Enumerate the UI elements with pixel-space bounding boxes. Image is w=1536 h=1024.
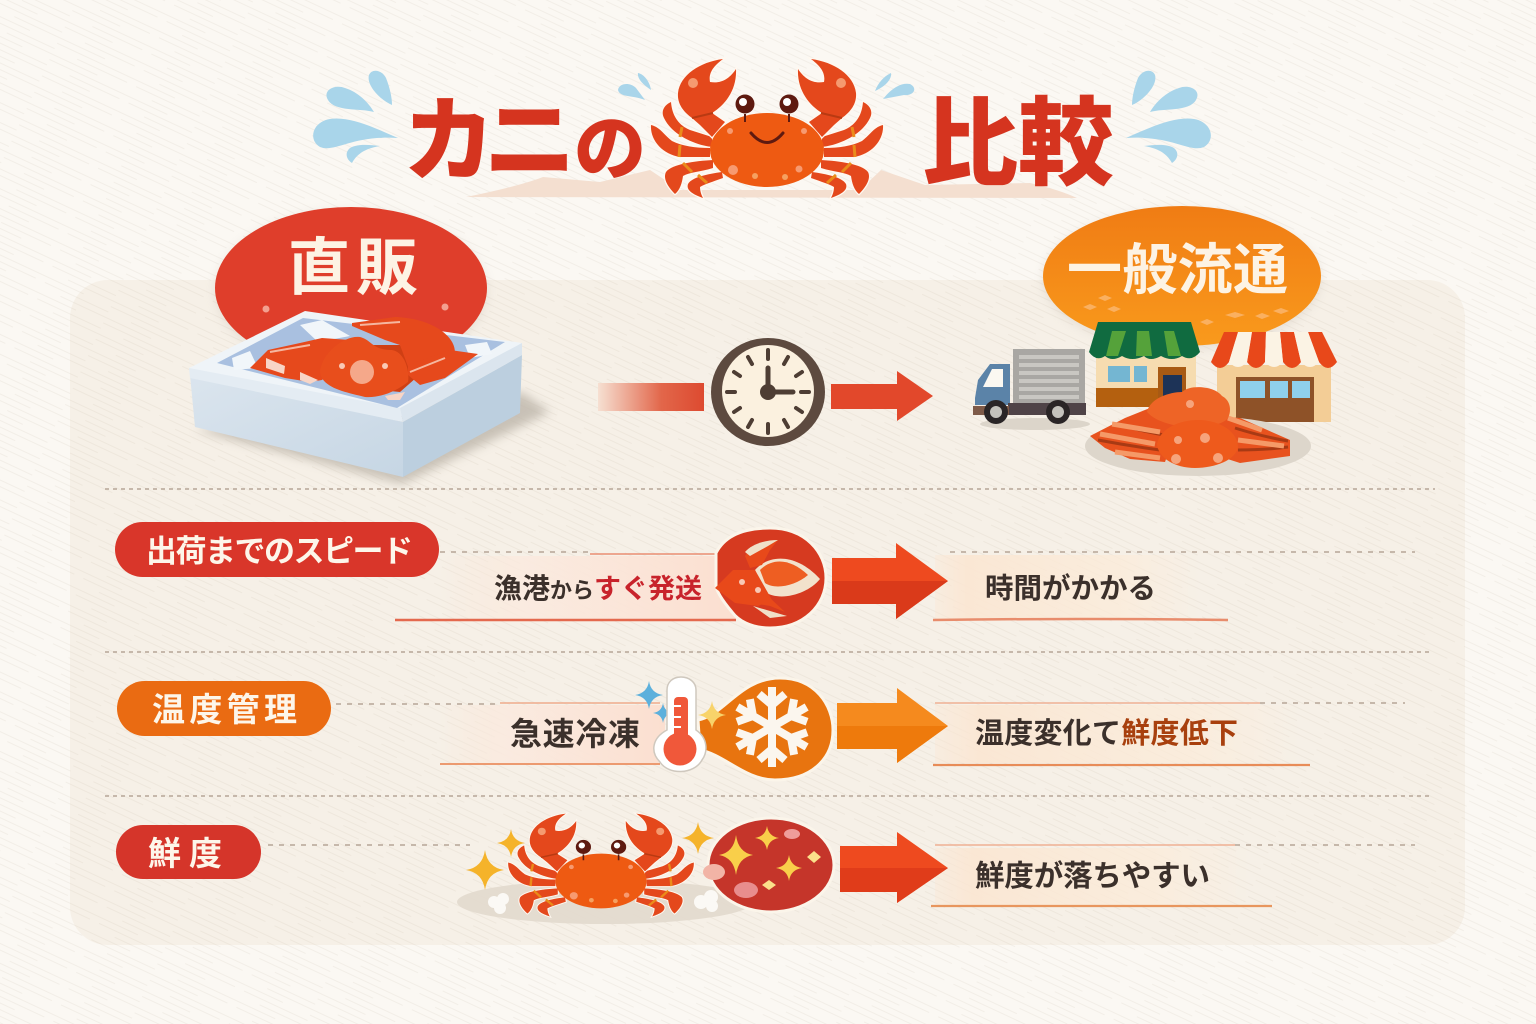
arrow: [832, 543, 948, 619]
header: title with crab: [313, 59, 1211, 198]
icon: truck: [973, 349, 1090, 430]
icon: striped shop: [1211, 332, 1337, 422]
text strip: general: [933, 555, 1228, 620]
icon: pile of crabs: [1085, 387, 1311, 476]
text strip: general: 鮮度が落ちやすい: [975, 859, 1210, 893]
water splash right: [1126, 71, 1211, 163]
icon: clock: [711, 338, 825, 446]
title text left: [403, 91, 646, 193]
arrow tail: [598, 383, 704, 411]
arrow: [840, 832, 948, 903]
shadow under crab: [457, 880, 753, 924]
icon: ice chunks: [488, 890, 718, 914]
row: freshness: [116, 814, 1415, 924]
arrow: [837, 688, 948, 763]
title text left: カ: [403, 91, 495, 193]
water splash left: [313, 71, 398, 163]
crabs inside box: [250, 317, 478, 400]
title text left: の: [574, 110, 646, 190]
title crab: [651, 59, 883, 198]
icon: sparkling red blob: [703, 818, 834, 912]
oval: general distribution: [1043, 206, 1321, 349]
label pill: freshness: 鮮度: [148, 835, 230, 872]
text strip: direct: 漁港からすぐ発送: [494, 573, 702, 604]
text strip: general: [933, 703, 1405, 765]
label pill: temperature: [117, 681, 331, 736]
row dividers: [105, 489, 1435, 796]
sand under title: [466, 170, 1077, 198]
title text left: ニ: [484, 91, 576, 193]
text strip: direct: [440, 703, 665, 764]
icon: blue sparkles: [635, 681, 673, 723]
label pill: temperature: 温度管理: [152, 691, 297, 728]
icon: red crab: [508, 814, 694, 917]
small droplets left: [618, 73, 651, 100]
label pill: shipping speed: [115, 522, 439, 577]
comparison panel: [70, 280, 1465, 945]
heading: direct sales: 直販: [288, 234, 424, 303]
label pill: shipping speed: 出荷までのスピード: [146, 534, 413, 569]
arrow head: [831, 371, 933, 421]
title text right: 比較: [922, 91, 1114, 198]
label pill: freshness: [116, 825, 261, 879]
heading: general distribution: 一般流通: [1067, 239, 1288, 301]
text strip: general: [931, 845, 1415, 906]
text strip: general: 時間がかかる: [985, 572, 1156, 605]
icon: crab pieces circle: [715, 528, 826, 628]
text strip: general: 温度変化て鮮度低下: [975, 717, 1238, 750]
arrow with clock: [598, 338, 933, 446]
text strip: direct: [395, 554, 736, 620]
row: temperature control: [117, 677, 1405, 780]
small droplets right: [875, 73, 914, 99]
icon: snowflake blob: [698, 678, 833, 780]
icon: green shop: [1089, 322, 1200, 407]
icon: thermometer: [654, 677, 706, 772]
text strip: direct: 急速冷凍: [510, 716, 640, 752]
illustration: truck, shops, crabs: [973, 322, 1337, 476]
oval: direct sales: [215, 207, 487, 372]
icon: gold sparkles: [466, 822, 714, 890]
row: shipping speed: [115, 522, 1415, 628]
icon: styrofoam box of crabs: [189, 311, 550, 484]
